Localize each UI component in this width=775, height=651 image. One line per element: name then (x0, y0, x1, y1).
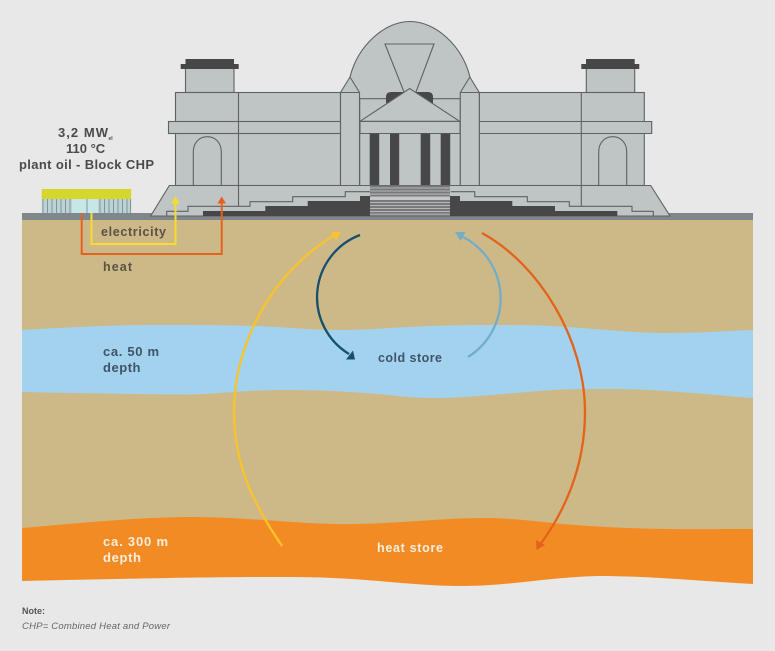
left terrace steps (167, 192, 370, 216)
label: CHP specifications: plant oil - Block CHP (19, 157, 154, 172)
electricity line arrow (92, 196, 180, 244)
heat line arrow (82, 196, 226, 254)
label: electricity: electricity (101, 225, 166, 239)
layer: heat store aquifer (22, 517, 753, 586)
label: ca. 50 m depth: ca. 50 m (103, 344, 159, 359)
panel: soil cross-section (22, 220, 753, 586)
note: Note: (22, 606, 45, 616)
label: cold store: cold store (378, 351, 442, 365)
label: ca. 300 m depth (103, 534, 168, 565)
note (22, 606, 171, 632)
plinth (151, 186, 670, 216)
portico (360, 88, 460, 186)
central staircase (370, 186, 450, 216)
label: CHP specifications: 3,2 MW (58, 125, 109, 140)
label: CHP specifications (19, 125, 154, 172)
right tower (581, 59, 639, 92)
dome (350, 22, 470, 100)
label: ca. 300 m depth: depth (103, 550, 141, 565)
layer: cold store aquifer (22, 325, 753, 398)
label: heat: heat (103, 260, 133, 274)
right dark stairs (450, 196, 617, 216)
arrow: light blue rising from cold store (455, 232, 501, 357)
arrow: yellow rising from heat store (234, 232, 341, 546)
label: CHP specifications: el (108, 136, 113, 142)
building: Reichstag (151, 22, 670, 216)
arrow: orange descending to heat store (482, 233, 585, 550)
left tower (181, 59, 239, 92)
right pillar (460, 77, 479, 186)
label: heat store: heat store (377, 541, 443, 555)
label: ca. 50 m depth: depth (103, 360, 141, 375)
arrow: dark blue descending to cold store (317, 235, 360, 360)
label: CHP specifications: 110 °C (66, 141, 106, 156)
CHP plant block (42, 189, 131, 213)
left pillar (340, 77, 360, 186)
left dark stairs (203, 196, 370, 216)
right terrace steps (451, 192, 653, 216)
dome window (385, 44, 434, 92)
ground strip (22, 213, 753, 220)
left wing (168, 92, 340, 206)
right wing (479, 92, 652, 206)
note: CHP= Combined Heat and Power (22, 621, 171, 632)
label: ca. 300 m depth: ca. 300 m (103, 534, 168, 549)
label: ca. 50 m depth (103, 344, 159, 375)
